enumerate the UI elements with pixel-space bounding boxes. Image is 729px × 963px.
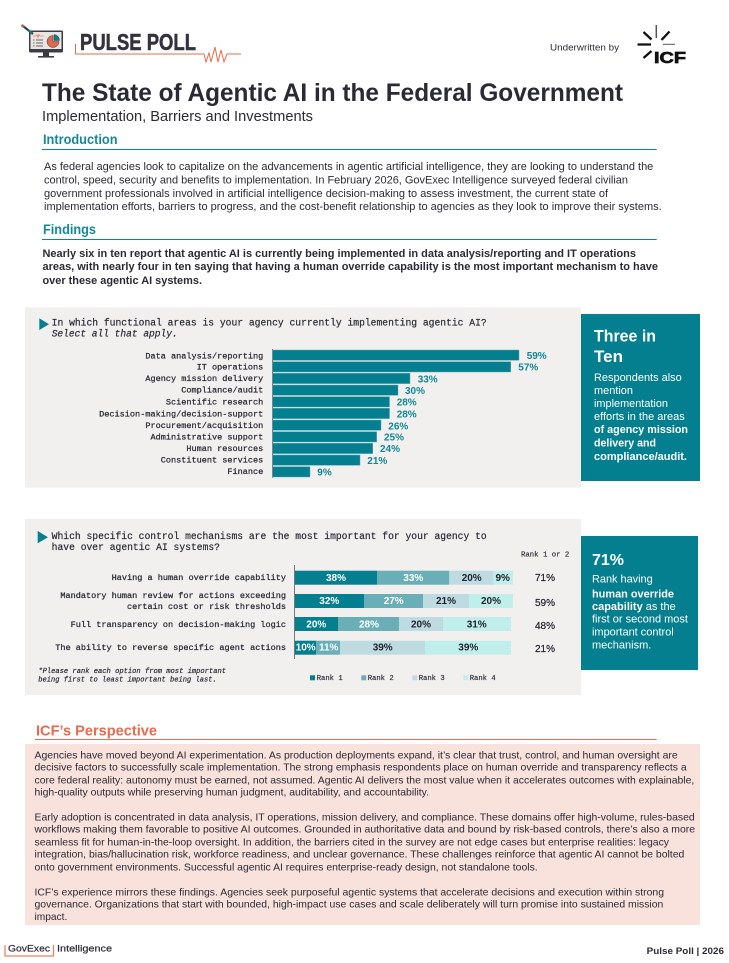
stacked bar chart: control mechanisms: 21%	[535, 644, 555, 655]
panel: ICF's perspective text: Early adoption is concentrated in data analysis, IT operations, mission delivery, and compliance. These domains offer high-volume, rules-based	[34, 812, 695, 823]
footer: Pulse Poll 2026: Pulse Poll | 2026	[647, 946, 724, 957]
stacked bar chart: control mechanisms: Full transparency on decision-making logic	[71, 620, 286, 630]
findings text: areas, with nearly four in ten saying that having a human override capability is the most important mechanism to have	[42, 261, 658, 273]
bar chart: functional areas: 21%	[367, 456, 387, 467]
bar chart: functional areas: 9%	[317, 468, 332, 478]
question text: have over agentic AI systems?	[52, 542, 220, 553]
subtitle: Implementation, Barriers and Investments	[42, 109, 313, 125]
stacked bar chart: control mechanisms: 71%	[535, 573, 555, 584]
logo: GovExec Intelligence	[5, 944, 112, 956]
findings text	[42, 248, 658, 287]
question text: Which specific control mechanisms are the most important for your agency to	[52, 531, 487, 542]
bar chart: functional areas: 28%	[397, 410, 417, 420]
bar chart: functional areas: 59%	[527, 351, 547, 362]
callout: Three in Ten: mention	[594, 385, 633, 397]
callout: Three in Ten: implementation	[594, 398, 668, 410]
stacked bar chart: control mechanisms: certain cost or risk thresholds	[127, 602, 286, 612]
legend: Rank 1	[317, 675, 343, 683]
panel: ICF's perspective text: impact.	[34, 912, 67, 923]
callout: 71%: 71%	[592, 552, 624, 569]
panel: ICF's perspective text: decisive factors to successfully scale implementation. The strong emphasis respondents place on human override and transparency reflects a	[34, 763, 687, 774]
question text	[52, 531, 487, 553]
callout: Three in Ten: Ten	[594, 347, 623, 366]
stacked bar chart: control mechanisms: 28%	[359, 620, 379, 631]
bar chart: functional areas: Administrative support	[150, 432, 263, 442]
callout: 71%: human override	[592, 588, 674, 600]
bar chart: functional areas	[99, 349, 547, 478]
logo: GovExec Intelligence: GovExec	[8, 944, 50, 955]
bar chart: functional areas: Compliance/audit	[181, 386, 263, 396]
callout: Three in Ten: of agency mission	[594, 424, 688, 436]
icon: monitor with pie chart	[22, 25, 63, 58]
stacked bar chart: control mechanisms: 59%	[535, 598, 555, 609]
legend: Rank 3	[419, 675, 445, 683]
panel: ICF's perspective text: integration, bias/hallucination risk, workforce readiness, and unclear governance. These challenges reinforce that agentic AI cannot be bolted	[34, 849, 685, 860]
heading: Findings: Findings	[43, 222, 96, 237]
bar chart: functional areas: Finance	[227, 467, 263, 477]
panel: control mechanisms chart	[25, 519, 581, 695]
question text: Select all that apply.	[52, 329, 178, 340]
bar chart: functional areas: Agency mission delivery	[145, 374, 263, 384]
callout: Three in Ten: compliance/audit.	[594, 451, 687, 463]
panel: ICF's perspective text: ICF’s experience mirrors these findings. Agencies seek purposeful agentic systems that accelerate decisions and execution within strong	[34, 887, 664, 898]
legend	[310, 675, 496, 683]
stacked bar chart: control mechanisms: 20%	[481, 596, 501, 607]
callout: Three in Ten: efforts in the areas	[594, 411, 685, 423]
bar chart: functional areas: Scientific research	[166, 397, 263, 407]
stacked bar chart: control mechanisms: 39%	[373, 643, 393, 654]
stacked bar chart: control mechanisms: 32%	[319, 596, 339, 607]
callout: 71%: important control	[592, 627, 674, 639]
bar chart: functional areas: Human resources	[186, 444, 263, 454]
stacked bar chart: control mechanisms	[55, 565, 555, 659]
legend: Rank 4	[470, 675, 496, 683]
findings text: over these agentic AI systems.	[42, 275, 202, 287]
stacked bar chart: control mechanisms: 31%	[467, 620, 487, 631]
stacked bar chart: control mechanisms: 21%	[436, 596, 456, 607]
introduction text: control, speed, security and benefits to implementation. In February 2026, GovExec Intelligence surveyed federal civilian	[44, 174, 628, 186]
logo: ICF	[638, 25, 686, 67]
title: The State of Agentic AI in the Federal Government	[42, 79, 624, 107]
logo: Pulse Poll wordmark	[76, 29, 241, 62]
panel: ICF's perspective text: seamless fit for human-in-the-loop oversight. In addition, the barriers cited in the survey are not edge cases but enterprise realities: legacy	[34, 837, 670, 848]
callout: 71%: first or second most	[592, 614, 688, 626]
introduction text: implementation efforts, barriers to progress, and the cost-benefit relationship to agencies as they look to improve their systems.	[44, 201, 662, 213]
footnote: *Please rank each option from most important	[38, 668, 226, 676]
panel: ICF's perspective text: workflows making them favorable to positive AI outcomes. Grounded in authoritative data and bound by risk-based controls, there’s also a more	[33, 824, 695, 835]
introduction text: As federal agencies look to capitalize on the advancements in agentic artificial intelligence, they are looking to understand the	[44, 161, 653, 173]
bar chart: functional areas: 25%	[384, 432, 404, 444]
stacked bar chart: control mechanisms: The ability to reverse specific agent actions	[55, 643, 286, 653]
stacked bar chart: control mechanisms: 38%	[326, 573, 346, 584]
callout: 71%: capability as the	[592, 601, 676, 613]
legend: Rank 2	[368, 675, 394, 683]
stacked bar chart: control mechanisms: 9%	[495, 573, 510, 584]
findings text: Nearly six in ten report that agentic AI is currently being implemented in data analysis/reporting and IT operations	[42, 248, 636, 260]
logo: Pulse Poll wordmark: PULSE POLL	[80, 29, 196, 55]
callout: Three in Ten	[581, 314, 700, 481]
panel: ICF's perspective text	[25, 744, 700, 925]
bar chart: functional areas: Constituent services	[161, 456, 263, 466]
callout: Three in Ten: Three in	[594, 327, 656, 346]
bar chart: functional areas: 33%	[418, 374, 438, 386]
panel: ICF's perspective text: core federal reality: autonomy must be earned, not assumed. Agentic AI delivers the most value when it accelerates outcomes with explainable,	[34, 775, 694, 786]
column header: Rank 1 or 2: Rank 1 or 2	[521, 552, 569, 560]
underwritten by label: Underwritten by	[550, 42, 619, 54]
question text: In which functional areas is your agency currently implementing agentic AI?	[52, 318, 487, 329]
question text	[52, 318, 487, 340]
icon: question arrow	[38, 531, 48, 543]
callout: 71%: mechanism.	[592, 640, 651, 652]
bar chart: functional areas: Data analysis/reporting	[145, 351, 263, 361]
heading: Introduction: Introduction	[43, 132, 118, 147]
callout: Three in Ten: delivery and	[594, 438, 656, 450]
stacked bar chart: control mechanisms: 27%	[384, 596, 404, 607]
stacked bar chart: control mechanisms: 11%	[319, 643, 339, 654]
callout: 71%	[581, 536, 698, 670]
bar chart: functional areas: 28%	[397, 398, 417, 408]
bar chart: functional areas: Procurement/acquisition	[145, 421, 263, 431]
bar chart: functional areas: 26%	[388, 422, 408, 432]
footnote	[38, 668, 226, 685]
introduction text: government professionals involved in artificial intelligence decision-making to assess investment, the current state of	[44, 188, 608, 200]
panel: ICF's perspective text: Agencies have moved beyond AI experimentation. As production deployments expand, it’s clear that trust, control, and human oversight are	[34, 750, 678, 761]
stacked bar chart: control mechanisms: 20%	[411, 620, 431, 631]
bar chart: functional areas: 24%	[380, 444, 400, 455]
icon: question arrow	[39, 318, 49, 330]
heading: ICF's Perspective: ICF’s Perspective	[36, 722, 157, 740]
stacked bar chart: control mechanisms: Having a human override capability	[112, 573, 286, 583]
stacked bar chart: control mechanisms: 33%	[403, 573, 423, 584]
bar chart: functional areas: IT operations	[197, 362, 263, 372]
bar chart: functional areas: 30%	[405, 386, 425, 397]
callout: Three in Ten: Respondents also	[594, 372, 682, 384]
introduction text	[44, 161, 662, 213]
logo: ICF: ICF	[654, 50, 686, 67]
panel: ICF's perspective text: high-quality outputs while preserving human judgment, auditability, and accountability.	[34, 787, 429, 798]
stacked bar chart: control mechanisms: 48%	[535, 621, 555, 632]
stacked bar chart: control mechanisms: 20%	[462, 573, 482, 584]
panel: functional areas chart	[25, 307, 581, 488]
panel: ICF's perspective text: governance. Organizations that start with bounded, high-impact use cases and scale deliberately will turn promise into sustained mission	[34, 899, 664, 910]
stacked bar chart: control mechanisms: 20%	[306, 620, 326, 631]
stacked bar chart: control mechanisms: Mandatory human review for actions exceeding	[60, 591, 286, 601]
callout: 71%: Rank having	[592, 574, 653, 586]
bar chart: functional areas: Decision-making/decision-support	[99, 409, 263, 419]
bar chart: functional areas: 57%	[518, 362, 538, 374]
footnote: being first to least important being last.	[38, 677, 217, 685]
panel: ICF's perspective text: onto government environments. Successful agentic AI requires enterprise-ready design, not standalone tools.	[34, 862, 538, 873]
stacked bar chart: control mechanisms: 10%	[296, 643, 316, 654]
logo: GovExec Intelligence: Intelligence	[57, 944, 112, 955]
stacked bar chart: control mechanisms: 39%	[458, 643, 478, 654]
